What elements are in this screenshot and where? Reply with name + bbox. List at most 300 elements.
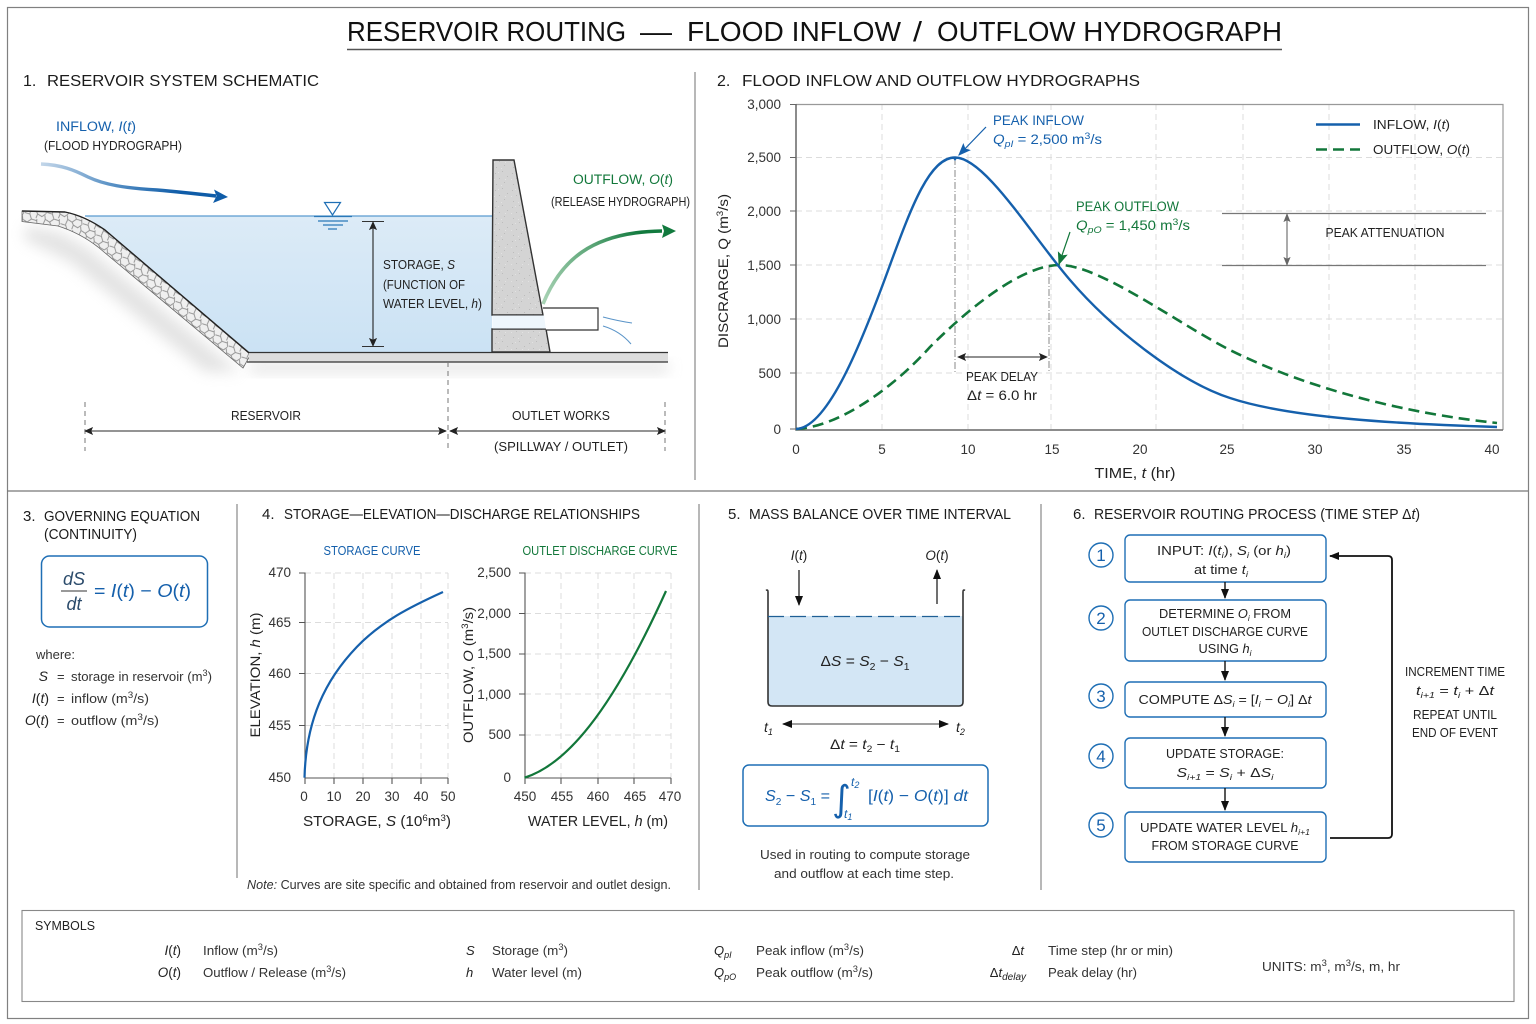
x axis labels: 35 — [1396, 442, 1412, 457]
step 5: FROM STORAGE CURVE — [1152, 838, 1299, 853]
symbols column 2 — [466, 942, 582, 980]
step 1: i — [1284, 550, 1287, 560]
chart: storage curve: 470 — [268, 565, 291, 580]
label: storage: (FUNCTION OF — [383, 277, 465, 292]
units: /s, m, hr — [1351, 959, 1401, 974]
x axis labels: 40 — [1484, 442, 1500, 457]
annotation: peak outflow: pO — [1087, 225, 1102, 236]
marker: peak dots — [952, 157, 958, 161]
symbols column 3 — [714, 942, 873, 982]
heading: section 2: 2. — [717, 73, 730, 90]
step 1: ), — [1224, 543, 1237, 558]
jet lines — [603, 317, 632, 344]
annotation: peak inflow: = 2,500 m — [1013, 132, 1084, 147]
chart: storage curve: 30 — [384, 789, 400, 804]
symbols column 4 — [990, 943, 1173, 983]
x axis labels: 10 — [960, 442, 976, 457]
annotation: peak inflow — [959, 113, 1102, 155]
y axis labels: 2,000 — [747, 204, 781, 219]
units: , m — [1327, 959, 1346, 974]
where list: O(t) — [25, 712, 49, 728]
y axis labels: 500 — [758, 366, 781, 381]
step 1 — [1089, 535, 1326, 582]
chart: storage curve: 0 — [300, 789, 308, 804]
equation box — [42, 556, 208, 627]
chart: storage curve: 10 — [326, 789, 342, 804]
chart: outlet discharge curve: /s) — [461, 607, 476, 623]
chart: outlet discharge curve: 2,000 — [477, 606, 511, 621]
time interval arrow: 2 — [959, 727, 965, 737]
outlet conduit — [543, 308, 598, 330]
step 2 — [1089, 600, 1326, 661]
ground slab shadow — [250, 362, 668, 373]
heading: section 3: (CONTINUITY) — [44, 526, 137, 543]
caption — [760, 847, 970, 881]
symbols column 1: Inflow (m — [203, 943, 256, 958]
where list: I(t) — [32, 690, 49, 706]
x axis labels: 30 — [1307, 442, 1323, 457]
label: storage: STORAGE, S — [383, 257, 455, 272]
where list: 3 — [203, 668, 208, 678]
embankment crest line — [22, 211, 249, 353]
stone embankment — [22, 211, 251, 368]
axis title: discharge: DISCRARGE, Q (m — [715, 226, 731, 348]
x axis labels: 25 — [1219, 442, 1235, 457]
annotation: peak inflow: 3 — [1084, 131, 1090, 142]
time interval arrow: 1 — [894, 744, 900, 754]
chart: storage curve: m — [428, 813, 441, 830]
chart: outlet discharge curve: WATER LEVEL, h (m) — [528, 813, 668, 830]
label: outflow: (RELEASE HYDROGRAPH) — [551, 194, 690, 209]
curve: inflow — [796, 158, 1497, 429]
annotation: peak inflow: PEAK INFLOW — [993, 113, 1084, 128]
chart: outlet discharge curve: 455 — [551, 789, 573, 804]
legend: OUTFLOW, O(t) — [1373, 142, 1470, 157]
curve: outflow — [796, 265, 1497, 429]
step 5 — [1089, 812, 1326, 862]
label: increment time: t — [1489, 683, 1496, 698]
x axis labels: 20 — [1132, 442, 1148, 457]
step 1: i — [1222, 550, 1225, 560]
chart: outlet discharge curve: 3 — [460, 623, 470, 629]
symbols column 2: 3 — [558, 942, 564, 952]
integral formula box: S — [765, 788, 776, 805]
where list: outflow (m — [71, 713, 131, 728]
symbols column 1: Outflow / Release (m — [203, 965, 324, 980]
symbols column 1: I(t) — [164, 943, 181, 958]
panel: symbols legend — [22, 910, 1514, 1002]
chart: outlet discharge curve: 460 — [587, 789, 609, 804]
y axis labels: 0 — [773, 422, 781, 437]
heading: section 3 — [23, 508, 200, 543]
chart: outlet discharge curve: 450 — [514, 789, 536, 804]
step 1: h — [1276, 543, 1284, 558]
arrow: 1 to 2 — [1224, 582, 1226, 598]
symbols column 3: Q — [714, 943, 724, 958]
step 3: ] Δ — [1290, 692, 1308, 707]
step 4: + Δ — [1232, 765, 1261, 780]
chart: outlet discharge curve: 1,000 — [477, 687, 511, 702]
arrow: outflow — [543, 224, 676, 304]
y axis labels: 2,500 — [747, 150, 781, 165]
step 4: i — [1271, 772, 1275, 782]
step 3: COMPUTE Δ S — [1138, 692, 1232, 707]
equation box: dS — [63, 569, 85, 589]
reservoir water body — [85, 216, 492, 352]
step 5: UPDATE WATER LEVEL h — [1140, 820, 1298, 835]
symbols column 1: 3 — [326, 964, 331, 974]
title: FLOOD INFLOW — [687, 16, 901, 47]
time interval arrow: t — [890, 737, 896, 752]
step 4: i — [1230, 772, 1233, 782]
where list: inflow (m — [71, 691, 123, 706]
chart: outlet discharge curve: 0 — [503, 770, 511, 785]
symbols column 3: 3 — [853, 964, 858, 974]
label: increment time: INCREMENT TIME — [1405, 664, 1505, 679]
axis title: discharge: /s) — [715, 194, 731, 211]
step 1: INPUT: I(t — [1157, 543, 1221, 558]
panel: reservoir system schematic — [22, 73, 690, 454]
axis title: time: TIME, t (hr) — [1094, 465, 1176, 482]
chart: outlet discharge curve: 465 — [624, 789, 646, 804]
step 2: DETERMINE O — [1159, 606, 1248, 621]
units: UNITS: m — [1262, 959, 1319, 974]
step 3: t — [1308, 692, 1313, 707]
symbols column 1: /s) — [263, 943, 278, 958]
symbols column 3: Peak outflow (m — [756, 965, 849, 980]
axis title: discharge: 3 — [715, 211, 725, 216]
label: inflow: INFLOW, I(t) — [56, 119, 136, 134]
where list: /s) — [143, 713, 159, 728]
arrow: I(t) in — [791, 548, 807, 605]
label: storage: WATER LEVEL, h) — [383, 296, 482, 311]
step 4: UPDATE STORAGE: — [1166, 746, 1284, 761]
chart: storage curve: 50 — [440, 789, 456, 804]
step 4: S — [1261, 765, 1272, 780]
symbols column 4: Δt — [990, 965, 1002, 980]
step 2: FROM — [1250, 606, 1291, 621]
annotation: peak inflow: Q — [993, 132, 1005, 147]
arrow: 2 to 3 — [1224, 661, 1226, 680]
label: increment time: REPEAT UNTIL — [1413, 707, 1497, 722]
heading: section 1: RESERVOIR SYSTEM SCHEMATIC — [47, 73, 319, 90]
label: increment time: i+1 — [1421, 690, 1435, 700]
dam upper body — [492, 160, 543, 315]
annotation: peak delay: PEAK DELAY — [966, 369, 1038, 384]
step 4: S — [1219, 765, 1230, 780]
step 4 — [1089, 738, 1326, 788]
chart: outlet discharge curve: 470 — [659, 789, 681, 804]
symbols column 1: 3 — [258, 942, 263, 952]
symbols column 2: Storage (m — [492, 943, 556, 958]
annotation: peak delay — [958, 357, 1047, 403]
chart: storage curve: 465 — [268, 615, 291, 630]
label: storage — [383, 257, 482, 311]
x axis labels — [792, 442, 1500, 457]
where list: where: — [35, 647, 75, 662]
annotation: peak outflow: PEAK OUTFLOW — [1076, 199, 1179, 214]
step 4: i+1 — [1187, 772, 1201, 782]
annotation: peak outflow: 3 — [1173, 217, 1178, 228]
annotation: peak outflow — [1059, 199, 1190, 264]
divider: panels 5 and 6 — [1040, 504, 1042, 890]
arrow: I(t) in: I(t) — [791, 548, 807, 563]
panel: governing equation — [23, 508, 212, 728]
time interval arrow: t — [764, 719, 768, 735]
step 1: (or — [1249, 543, 1276, 558]
units: 3 — [1322, 958, 1327, 968]
ground slab — [249, 352, 668, 362]
integral formula box: t — [844, 807, 847, 821]
label: increment time: i — [1458, 690, 1462, 700]
integral formula box: 2 — [853, 780, 859, 790]
arrow: 3 to 4 — [1224, 717, 1226, 736]
y axis labels: 1,000 — [747, 312, 781, 327]
integral formula box: S — [800, 788, 811, 805]
step 2: OUTLET DISCHARGE CURVE — [1142, 624, 1308, 639]
chart: outlet discharge curve: 2,500 — [477, 565, 511, 580]
chart: storage curve: STORAGE CURVE — [324, 543, 421, 558]
title — [347, 16, 1282, 50]
step 1: ) — [1286, 543, 1291, 558]
heading: symbols: SYMBOLS — [35, 918, 95, 933]
time interval arrow — [764, 719, 965, 754]
where list — [25, 647, 212, 728]
symbols column 3: /s) — [858, 965, 873, 980]
chart: storage curve: 450 — [268, 770, 291, 785]
where list: = — [57, 691, 65, 706]
where list: storage in reservoir (m — [71, 669, 201, 684]
units: 3 — [1346, 958, 1351, 968]
chart: storage curve — [248, 543, 456, 830]
where list: = — [57, 713, 65, 728]
where list: S — [39, 668, 49, 684]
step 3: 3 — [1096, 687, 1106, 706]
annotation: peak attenuation — [1222, 214, 1486, 266]
arrow: O(t) out — [925, 548, 949, 604]
panel: storage elevation discharge — [247, 506, 681, 892]
step 3: i — [1288, 699, 1291, 709]
chart: storage curve: ELEVATION, h (m) — [248, 612, 263, 738]
step 2: i — [1250, 648, 1253, 658]
tank diagram: ΔS = S — [820, 653, 869, 670]
label: outflow: OUTFLOW, O(t) — [573, 172, 673, 187]
annotation: peak attenuation: PEAK ATTENUATION — [1326, 225, 1444, 240]
heading: section 2: FLOOD INFLOW AND OUTFLOW HYDROGRAPHS — [742, 73, 1140, 90]
annotation: peak delay: Δt = 6.0 hr — [967, 388, 1038, 403]
annotation: peak outflow: = 1,450 m — [1102, 218, 1173, 233]
heading: section 5: MASS BALANCE OVER TIME INTERVAL — [749, 506, 1011, 523]
arrow: feedback loop — [1330, 556, 1392, 838]
label: increment time: + Δ — [1460, 683, 1490, 698]
symbols column 2: Water level (m) — [492, 965, 582, 980]
step 3: i — [1233, 699, 1236, 709]
equation box: dt — [66, 594, 83, 614]
dimension: reservoir and outlet works — [85, 362, 665, 454]
heading: section 4: STORAGE—ELEVATION—DISCHARGE RELATIONSHIPS — [284, 506, 640, 523]
divider: horizontal — [7, 490, 1528, 492]
heading: section 5: 5. — [728, 506, 741, 523]
step 3: − — [1261, 692, 1277, 707]
arrow: inflow — [41, 164, 228, 203]
where list: = — [57, 669, 65, 684]
annotation: peak outflow: Q — [1076, 218, 1088, 233]
integral formula box: 1 — [847, 812, 852, 822]
chart: outlet discharge curve: OUTFLOW, O (m — [461, 631, 476, 743]
step 2: 2 — [1096, 609, 1106, 628]
divider: panels 4 and 5 — [698, 504, 700, 890]
symbols column 3: pO — [723, 972, 736, 982]
chart: outlet discharge curve: OUTLET DISCHARGE CURVE — [522, 543, 678, 558]
label: increment time: t — [1416, 683, 1422, 698]
step 4: 4 — [1096, 747, 1106, 766]
dimension: reservoir and outlet works: OUTLET WORKS — [512, 408, 610, 423]
symbols column 4: Δt — [1012, 943, 1025, 958]
dimension: reservoir and outlet works: RESERVOIR — [231, 408, 301, 423]
time interval arrow: 2 — [867, 744, 872, 754]
where list: 3 — [128, 690, 133, 700]
time interval arrow: − — [872, 737, 890, 752]
dam lower body — [492, 329, 550, 352]
integral formula box: ∫ — [832, 779, 851, 820]
y axis labels — [747, 97, 781, 437]
x axis labels: 0 — [792, 442, 800, 457]
time interval arrow: 1 — [768, 727, 773, 737]
x axis labels: 5 — [878, 442, 886, 457]
where list: 3 — [137, 712, 143, 722]
title: RESERVOIR ROUTING — [347, 16, 626, 47]
symbols column 3: /s) — [849, 943, 864, 958]
step 2: i — [1248, 613, 1251, 623]
step 1: i — [1247, 550, 1250, 560]
integral formula box: [I(t) − O(t)] dt — [868, 788, 969, 805]
symbols column 2: S — [466, 943, 475, 958]
step 3: O — [1277, 692, 1288, 707]
symbols column 1: O(t) — [158, 965, 181, 980]
label: outflow — [551, 172, 690, 209]
note: Note: Curves are site specific and obtained from reservoir and outlet design. — [247, 878, 671, 892]
chart: storage curve: STORAGE, S (10 — [303, 813, 422, 830]
chart: outlet discharge curve — [460, 543, 681, 830]
heading: section 6: 6. — [1073, 506, 1086, 523]
symbols column 4: Time step (hr or min) — [1048, 943, 1173, 958]
title: — — [640, 16, 673, 47]
y axis labels: 3,000 — [747, 97, 781, 112]
symbols column 3: 3 — [844, 942, 849, 952]
chart: storage curve: 6 — [422, 813, 428, 824]
chart: outlet discharge curve: 500 — [488, 727, 511, 742]
label: increment time: = — [1435, 683, 1453, 698]
step 3 — [1089, 682, 1326, 717]
step 4: = — [1201, 765, 1219, 780]
step 3: i — [1259, 699, 1262, 709]
water surface line — [85, 215, 492, 217]
step 5: i+1 — [1298, 827, 1310, 837]
symbols column 2: h — [466, 965, 473, 980]
step 2: USING h — [1198, 641, 1250, 656]
panel: hydrographs — [715, 73, 1503, 482]
arrow: storage height — [362, 222, 384, 346]
equation box: = I(t) − O(t) — [94, 580, 191, 601]
chart: outlet discharge curve: 1,500 — [477, 646, 511, 661]
step 4: S — [1176, 765, 1187, 780]
integral formula box: 2 — [776, 797, 782, 808]
symbols column 1: /s) — [331, 965, 346, 980]
divider: panels 1 and 2 — [694, 72, 696, 480]
symbols column 3: pI — [723, 950, 732, 960]
y axis labels: 1,500 — [747, 258, 781, 273]
where list: /s) — [133, 691, 149, 706]
label: inflow — [44, 119, 182, 153]
outlet opening — [492, 316, 546, 328]
tank diagram: 2 — [870, 662, 876, 673]
arrow: O(t) out: O(t) — [925, 548, 949, 563]
bank shadow — [25, 226, 240, 372]
x axis labels: 15 — [1044, 442, 1060, 457]
title: / — [913, 16, 922, 47]
legend: INFLOW, I(t) — [1373, 117, 1450, 132]
title: OUTFLOW HYDROGRAPH — [937, 16, 1282, 47]
chart: storage curve: ) — [446, 813, 451, 830]
hydrograph chart — [715, 97, 1503, 482]
step 1: S — [1237, 543, 1247, 558]
divider: panels 3 and 4 — [236, 504, 238, 878]
chart: storage curve: 20 — [355, 789, 371, 804]
heading: section 3: 3. — [23, 508, 36, 525]
reference lines: peak times — [955, 158, 1049, 372]
heading: section 4: 4. — [262, 506, 275, 523]
integral formula box — [743, 765, 988, 826]
step 1: i — [1246, 569, 1249, 579]
legend — [1316, 117, 1470, 157]
tank diagram: − — [875, 653, 893, 670]
tank diagram — [766, 590, 965, 706]
time interval arrow: t — [956, 719, 960, 735]
panel: mass balance — [728, 506, 1011, 881]
symbols column 3: Peak inflow (m — [756, 943, 841, 958]
time interval arrow: Δt = t — [830, 737, 866, 752]
label: increment time: END OF EVENT — [1412, 725, 1498, 740]
annotation: peak inflow: /s — [1090, 132, 1102, 147]
chart: storage curve: 3 — [441, 813, 446, 824]
chart: storage curve: 460 — [268, 666, 291, 681]
caption: and outflow at each time step. — [774, 866, 954, 881]
chart: storage curve: 40 — [413, 789, 429, 804]
symbols column 3: Q — [714, 965, 724, 980]
label: increment time — [1405, 664, 1505, 740]
label: inflow: (FLOOD HYDROGRAPH) — [44, 138, 182, 153]
panel: routing process — [1073, 506, 1505, 862]
heading: section 3: GOVERNING EQUATION — [44, 508, 200, 525]
symbols column 2: ) — [564, 943, 568, 958]
label: increment time: t — [1453, 683, 1460, 698]
integral formula box: t — [851, 775, 854, 789]
caption: Used in routing to compute storage — [760, 847, 970, 862]
slab edges — [247, 352, 668, 362]
arrow: 4 to 5 — [1224, 788, 1226, 810]
step 1: at time t — [1194, 562, 1245, 577]
annotation: peak outflow: /s — [1178, 218, 1190, 233]
step 3: I — [1255, 692, 1259, 707]
step 1: 1 — [1096, 546, 1106, 565]
tank diagram: 1 — [904, 662, 910, 673]
tank diagram: S — [893, 653, 904, 670]
symbols column 4: delay — [1002, 972, 1027, 983]
icon: water level symbol — [314, 202, 352, 229]
heading: section 6: RESERVOIR ROUTING PROCESS (TIME STEP Δt) — [1094, 506, 1420, 523]
symbols column 1 — [158, 942, 346, 980]
step 5: 5 — [1096, 816, 1106, 835]
